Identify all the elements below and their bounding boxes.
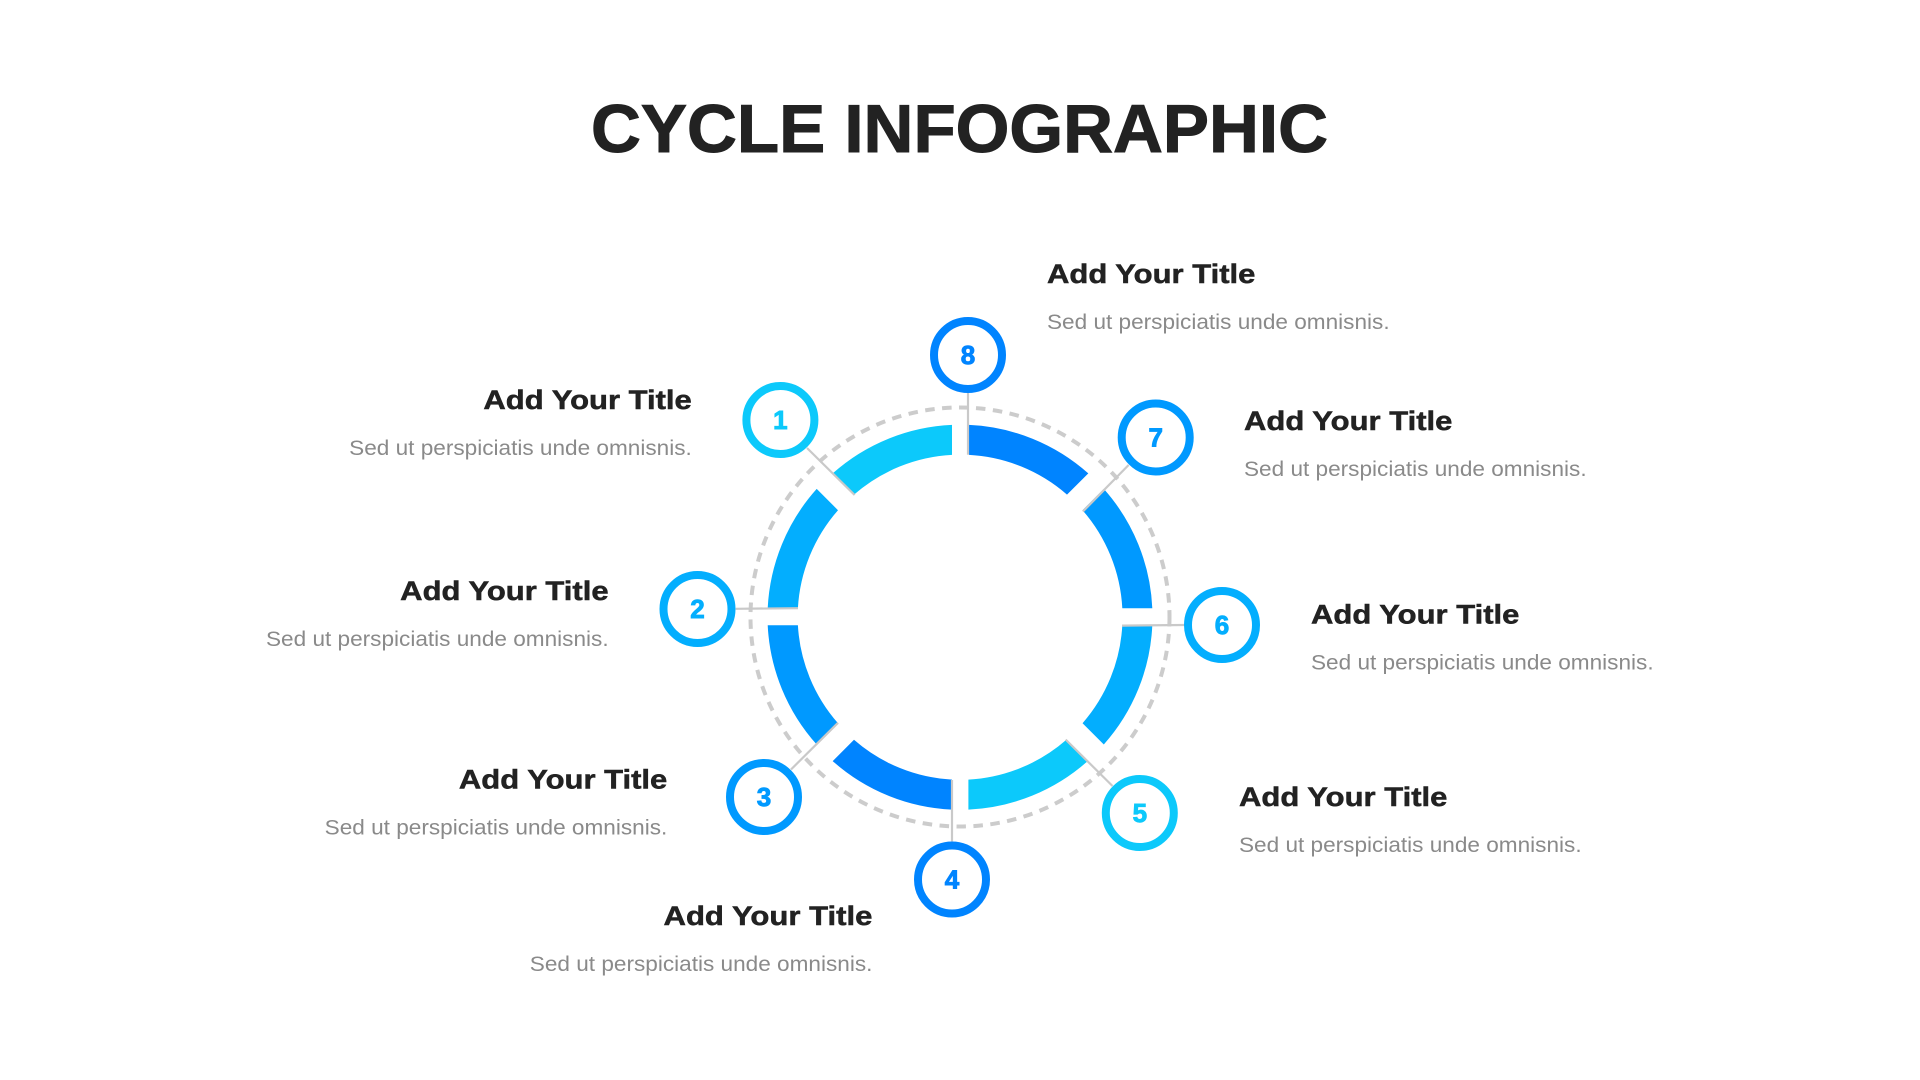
connector 5 — [1066, 740, 1112, 786]
label 1 — [349, 385, 692, 460]
segment 6 — [1083, 625, 1152, 744]
badge 7 — [1122, 404, 1190, 472]
connector lines — [736, 393, 1184, 841]
label 1: Sed ut perspiciatis unde omnisnis. — [349, 437, 692, 460]
badge 6 — [1188, 591, 1256, 659]
badge 6: 6 — [1215, 610, 1229, 640]
connector 6 — [1122, 624, 1184, 627]
label 1: Add Your Title — [483, 385, 692, 415]
dashed orbit circle — [750, 408, 1170, 826]
title: CYCLE INFOGRAPHIC — [591, 91, 1328, 167]
label 4: Add Your Title — [664, 901, 872, 931]
connector 2 — [736, 607, 798, 610]
label 3 — [325, 765, 667, 840]
badge 4 — [918, 846, 986, 914]
segment 2 — [768, 489, 838, 608]
label 3: Sed ut perspiciatis unde omnisnis. — [325, 817, 667, 840]
label 7: Sed ut perspiciatis unde omnisnis. — [1244, 458, 1587, 481]
segment 8 — [969, 425, 1088, 495]
badge 7: 7 — [1148, 422, 1163, 452]
label 7: Add Your Title — [1244, 406, 1452, 436]
badge 3: 3 — [757, 782, 771, 812]
badge 2: 2 — [690, 594, 705, 624]
label 4: Sed ut perspiciatis unde omnisnis. — [530, 953, 872, 976]
badge 3 — [730, 763, 798, 831]
label 6: Sed ut perspiciatis unde omnisnis. — [1311, 651, 1654, 674]
label 8 — [1047, 259, 1390, 334]
segment 7 — [1083, 489, 1152, 608]
label 5 — [1239, 782, 1582, 857]
connector 3 — [791, 723, 838, 770]
label 3: Add Your Title — [459, 765, 667, 795]
badge 2 — [664, 575, 732, 643]
badge 1 — [746, 386, 814, 454]
segment 5 — [968, 740, 1088, 810]
label 5: Sed ut perspiciatis unde omnisnis. — [1239, 834, 1582, 857]
label 2 — [266, 576, 609, 651]
label 6 — [1311, 599, 1654, 674]
label 5: Add Your Title — [1239, 782, 1447, 812]
segment 1 — [833, 425, 952, 495]
cycle ring segments — [768, 425, 1152, 810]
segment 3 — [768, 625, 838, 744]
badge 5 — [1106, 779, 1174, 847]
badge 8: 8 — [961, 340, 975, 370]
label 2: Sed ut perspiciatis unde omnisnis. — [266, 628, 609, 651]
connector 8 — [967, 393, 969, 455]
badge 4: 4 — [945, 864, 960, 894]
label 8: Sed ut perspiciatis unde omnisnis. — [1047, 311, 1390, 334]
connector 4 — [951, 780, 953, 841]
label 4 — [530, 901, 872, 976]
segment 4 — [833, 740, 952, 810]
label 8: Add Your Title — [1047, 259, 1255, 289]
badge 5: 5 — [1133, 798, 1147, 828]
label 7 — [1244, 406, 1587, 481]
label 6: Add Your Title — [1311, 599, 1519, 629]
connector 1 — [807, 448, 855, 495]
badge 1: 1 — [773, 405, 788, 435]
badge 8 — [934, 321, 1002, 389]
connector 7 — [1083, 465, 1129, 512]
label 2: Add Your Title — [400, 576, 609, 606]
